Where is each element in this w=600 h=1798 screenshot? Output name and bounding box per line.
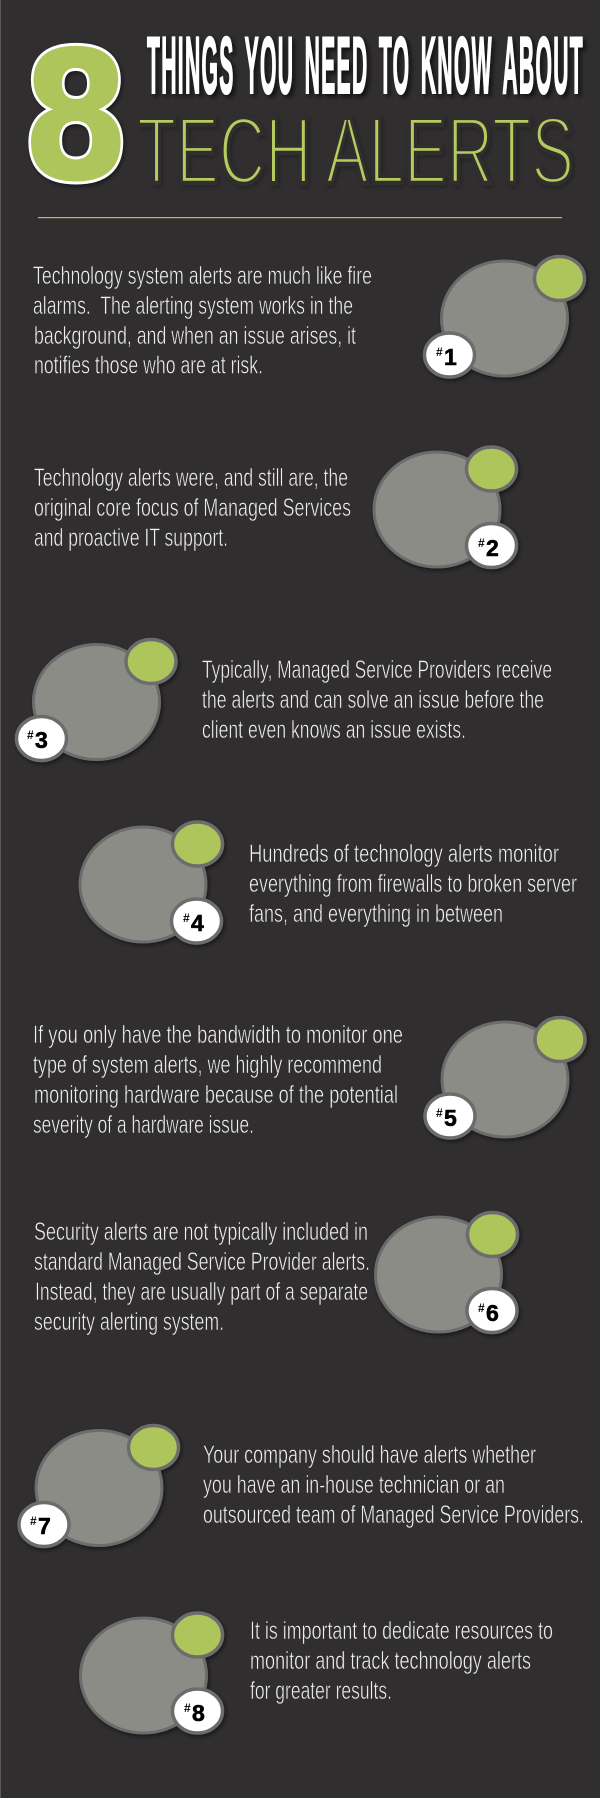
text block 1: Technology system alerts are much like fire: [33, 262, 372, 290]
badge #2: #: [478, 536, 485, 550]
badge #1: #: [436, 345, 443, 359]
text block 5: type of system alerts, we highly recommend: [33, 1051, 382, 1079]
text block 4: fans, and everything in between: [249, 900, 503, 928]
badge #6: 6: [486, 1300, 499, 1326]
badge #4: #: [183, 911, 190, 925]
text block 1: [33, 262, 372, 380]
badge #5: [425, 1018, 585, 1138]
badge #7: [19, 1426, 178, 1546]
text block 2: [34, 464, 351, 552]
text block 5: If you only have the bandwidth to monitor one: [33, 1021, 403, 1049]
text block 4: [249, 840, 577, 928]
text block 6: [34, 1218, 370, 1336]
text block 2: original core focus of Managed Services: [34, 494, 351, 522]
text block 1: background, and when an issue arises, it: [34, 322, 356, 350]
badge #7: #: [30, 1514, 37, 1528]
text block 3: [202, 656, 552, 744]
title: big numeral 8: 8: [22, 14, 130, 221]
badge #1: 1: [444, 344, 457, 370]
badge #4: [80, 822, 222, 943]
badge #3: [16, 640, 176, 760]
badge #8: [80, 1613, 222, 1733]
badge #1: [424, 256, 584, 377]
badge #3: 3: [35, 727, 48, 753]
text block 5: [33, 1021, 403, 1139]
badge #5: 5: [444, 1105, 457, 1131]
text block 2: Technology alerts were, and still are, the: [34, 464, 348, 492]
text block 1: alarms. The alerting system works in the: [33, 292, 353, 320]
badge #2: [374, 447, 516, 568]
badge #8: 8: [192, 1700, 205, 1726]
text block 1: notifies those who are at risk.: [34, 352, 263, 380]
text block 3: client even knows an issue exists.: [202, 716, 466, 744]
text block 7: [203, 1441, 584, 1529]
badge #6: [376, 1212, 518, 1332]
text block 2: and proactive IT support.: [34, 524, 228, 552]
badge #8: #: [184, 1701, 191, 1715]
text block 8: for greater results.: [250, 1677, 392, 1705]
title: big numeral 8: 8: [22, 14, 130, 221]
text block 6: security alerting system.: [34, 1308, 224, 1336]
badge #3: #: [27, 728, 34, 742]
divider: [38, 217, 562, 218]
text block 6: Security alerts are not typically included in: [34, 1218, 368, 1246]
badge #6: #: [478, 1301, 485, 1315]
badge #2: 2: [486, 535, 499, 561]
badge #5: #: [436, 1106, 443, 1120]
text block 6: standard Managed Service Provider alerts.: [34, 1248, 370, 1276]
badge #7: 7: [38, 1513, 51, 1539]
text block 6: Instead, they are usually part of a separate: [35, 1278, 368, 1306]
text block 5: monitoring hardware because of the potential: [34, 1081, 398, 1109]
badge #4: 4: [191, 910, 204, 936]
text block 5: severity of a hardware issue.: [33, 1111, 254, 1139]
text block 8: [250, 1617, 553, 1705]
